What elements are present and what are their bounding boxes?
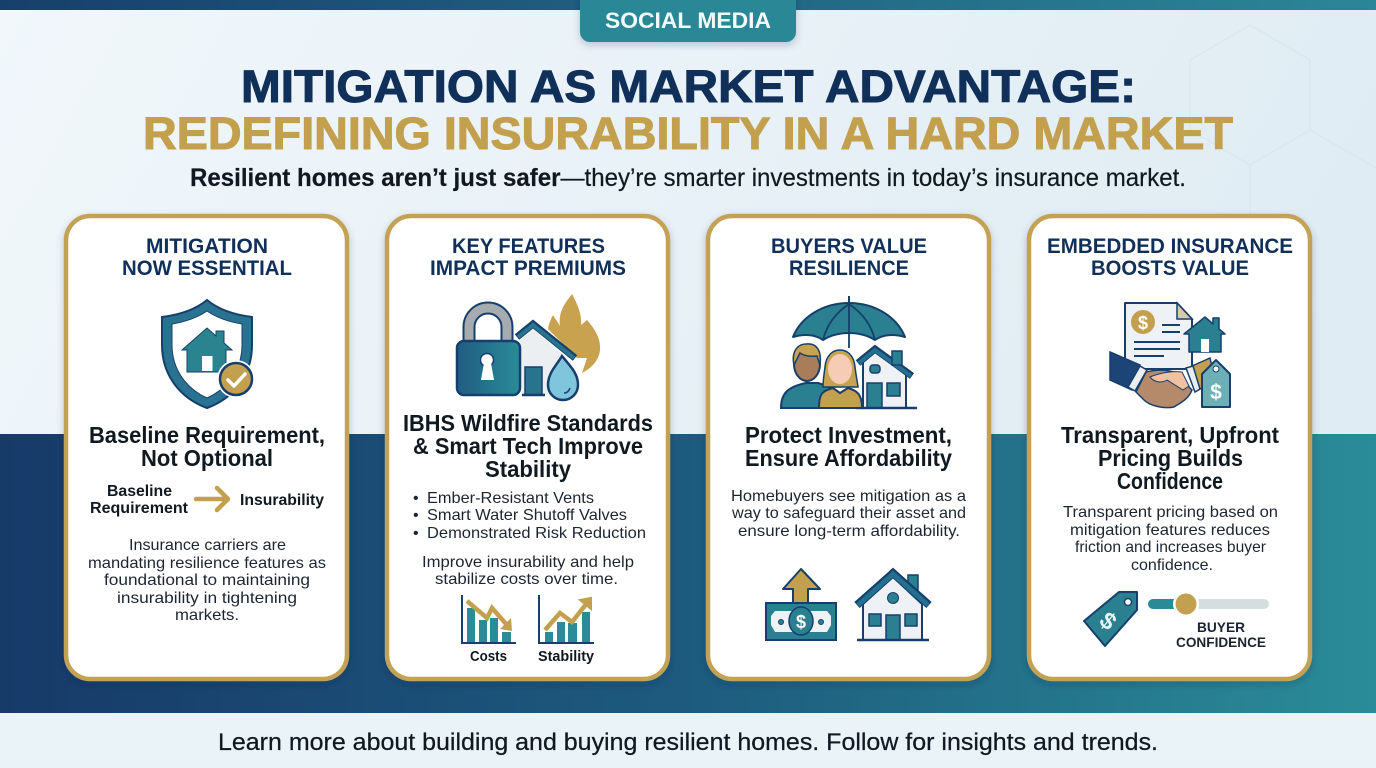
- heading: buyers value: BUYERS VALUE: [771, 235, 927, 258]
- icon: family under umbrella with house: [781, 296, 917, 408]
- subheading: Transparent, Upfront: [1061, 422, 1279, 448]
- heading: embedded insurance: [1047, 235, 1293, 280]
- heading: key features: [430, 235, 626, 280]
- body text: mitigation features reduces: [1070, 522, 1270, 539]
- icon: house: [857, 573, 929, 640]
- panel: mitigation now essential: [66, 216, 347, 679]
- bullet list: •: [413, 507, 419, 524]
- bullet list: •: [413, 525, 419, 542]
- body text: foundational to maintaining: [104, 572, 310, 589]
- body text: stabilize costs over time.: [435, 571, 618, 588]
- icon: shield with house and check: [162, 300, 255, 408]
- subheading: Stability: [485, 456, 571, 482]
- bullet list: Ember-Resistant Vents: [427, 490, 594, 507]
- heading: mitigation: MITIGATION: [146, 235, 268, 258]
- icon: document, handshake, house and price tag: $: [1210, 381, 1222, 404]
- bullet list: [413, 490, 646, 542]
- heading: mitigation: NOW ESSENTIAL: [122, 257, 292, 280]
- slider label: BUYER: [1197, 619, 1245, 635]
- panel: key features impact premiums: [387, 216, 668, 679]
- tag: social media: SOCIAL MEDIA: [605, 8, 771, 33]
- body text: Transparent pricing based on: [1063, 504, 1278, 521]
- arrow: [196, 488, 228, 510]
- subheading: Not Optional: [141, 445, 273, 471]
- heading: key features: KEY FEATURES: [452, 235, 605, 258]
- body text: insurability in tightening: [117, 590, 297, 607]
- body text: markets.: [175, 607, 239, 624]
- body text: [731, 488, 966, 540]
- panel: buyers value resilience: [708, 216, 989, 679]
- subheading: IBHS Wildfire Standards: [403, 410, 653, 436]
- chart label: Stability: [538, 649, 594, 665]
- body text: Insurance carriers are: [129, 537, 286, 554]
- heading: embedded insurance: BOOSTS VALUE: [1091, 257, 1249, 280]
- slider: buyer confidence: CONFIDENCE: [1176, 634, 1266, 650]
- icon: price tag: $: [1094, 607, 1122, 636]
- body text: friction and increases buyer: [1075, 539, 1267, 556]
- bullet list: •: [413, 490, 419, 507]
- flow: baseline requirement to insurability: Baseline: [107, 483, 172, 500]
- tag: social media: [580, 0, 796, 42]
- bullet list: Smart Water Shutoff Valves: [427, 507, 627, 524]
- icon: price tag: [1084, 592, 1137, 646]
- chart label: Costs: [470, 649, 507, 665]
- body text: [1063, 504, 1278, 574]
- subheading: [1061, 422, 1279, 494]
- subheading: [89, 422, 325, 471]
- title: REDEFINING INSURABILITY IN A HARD MARKET: [143, 108, 1233, 159]
- chart icon: costs falling: [462, 595, 516, 665]
- subheading: Ensure Affordability: [745, 445, 952, 471]
- body text: Improve insurability and help: [422, 554, 634, 571]
- body text: confidence.: [1131, 557, 1213, 574]
- heading: mitigation: [122, 235, 292, 280]
- subheading: [403, 410, 653, 482]
- heading: embedded insurance: EMBEDDED INSURANCE: [1047, 235, 1293, 258]
- body text: way to safeguard their asset and: [731, 505, 966, 522]
- bullet list: Demonstrated Risk Reduction: [427, 525, 646, 542]
- icon: document, handshake, house and price tag: [1110, 303, 1230, 408]
- subheading: & Smart Tech Improve: [413, 433, 643, 459]
- body text: mandating resilience features as: [88, 555, 326, 572]
- heading: key features: IMPACT PREMIUMS: [430, 257, 626, 280]
- subheading: Baseline Requirement,: [89, 422, 325, 448]
- panel: embedded insurance boosts value: [1029, 216, 1310, 679]
- chart icon: stability rising: [538, 595, 594, 665]
- flow: baseline requirement to insurability: Requirement: [90, 500, 189, 517]
- subheading: Pricing Builds: [1098, 445, 1243, 471]
- slider: buyer confidence: [1148, 591, 1269, 650]
- subheading: Protect Investment,: [745, 422, 952, 448]
- body text: [88, 537, 326, 624]
- title: MITIGATION AS MARKET ADVANTAGE:: [241, 61, 1136, 112]
- icon: money with up arrow: [766, 569, 836, 640]
- footer strip background: [0, 713, 1376, 768]
- flow: baseline requirement to insurability: Insurability: [240, 492, 324, 509]
- icon: lock, house, flame and water drop: [457, 294, 600, 400]
- subtitle: Resilient homes aren’t just safer—they’re smarter investments in today’s insurance market.: [190, 164, 1186, 192]
- heading: buyers value: RESILIENCE: [789, 257, 909, 280]
- flow: baseline requirement to insurability: [90, 483, 324, 517]
- body text: Homebuyers see mitigation as a: [731, 488, 966, 505]
- lower colour band: [0, 434, 1376, 713]
- subheading: Confidence: [1117, 468, 1223, 494]
- subheading: [745, 422, 952, 471]
- heading: buyers value: [771, 235, 927, 280]
- title: [143, 61, 1233, 159]
- footer call to action: Learn more about building and buying resilient homes. Follow for insights and trends.: [218, 729, 1158, 756]
- icon: document, handshake, house and price tag: $: [1138, 313, 1148, 333]
- icon: money with up arrow: $: [796, 612, 806, 632]
- body text: ensure long-term affordability.: [738, 523, 960, 540]
- body text: [422, 554, 634, 588]
